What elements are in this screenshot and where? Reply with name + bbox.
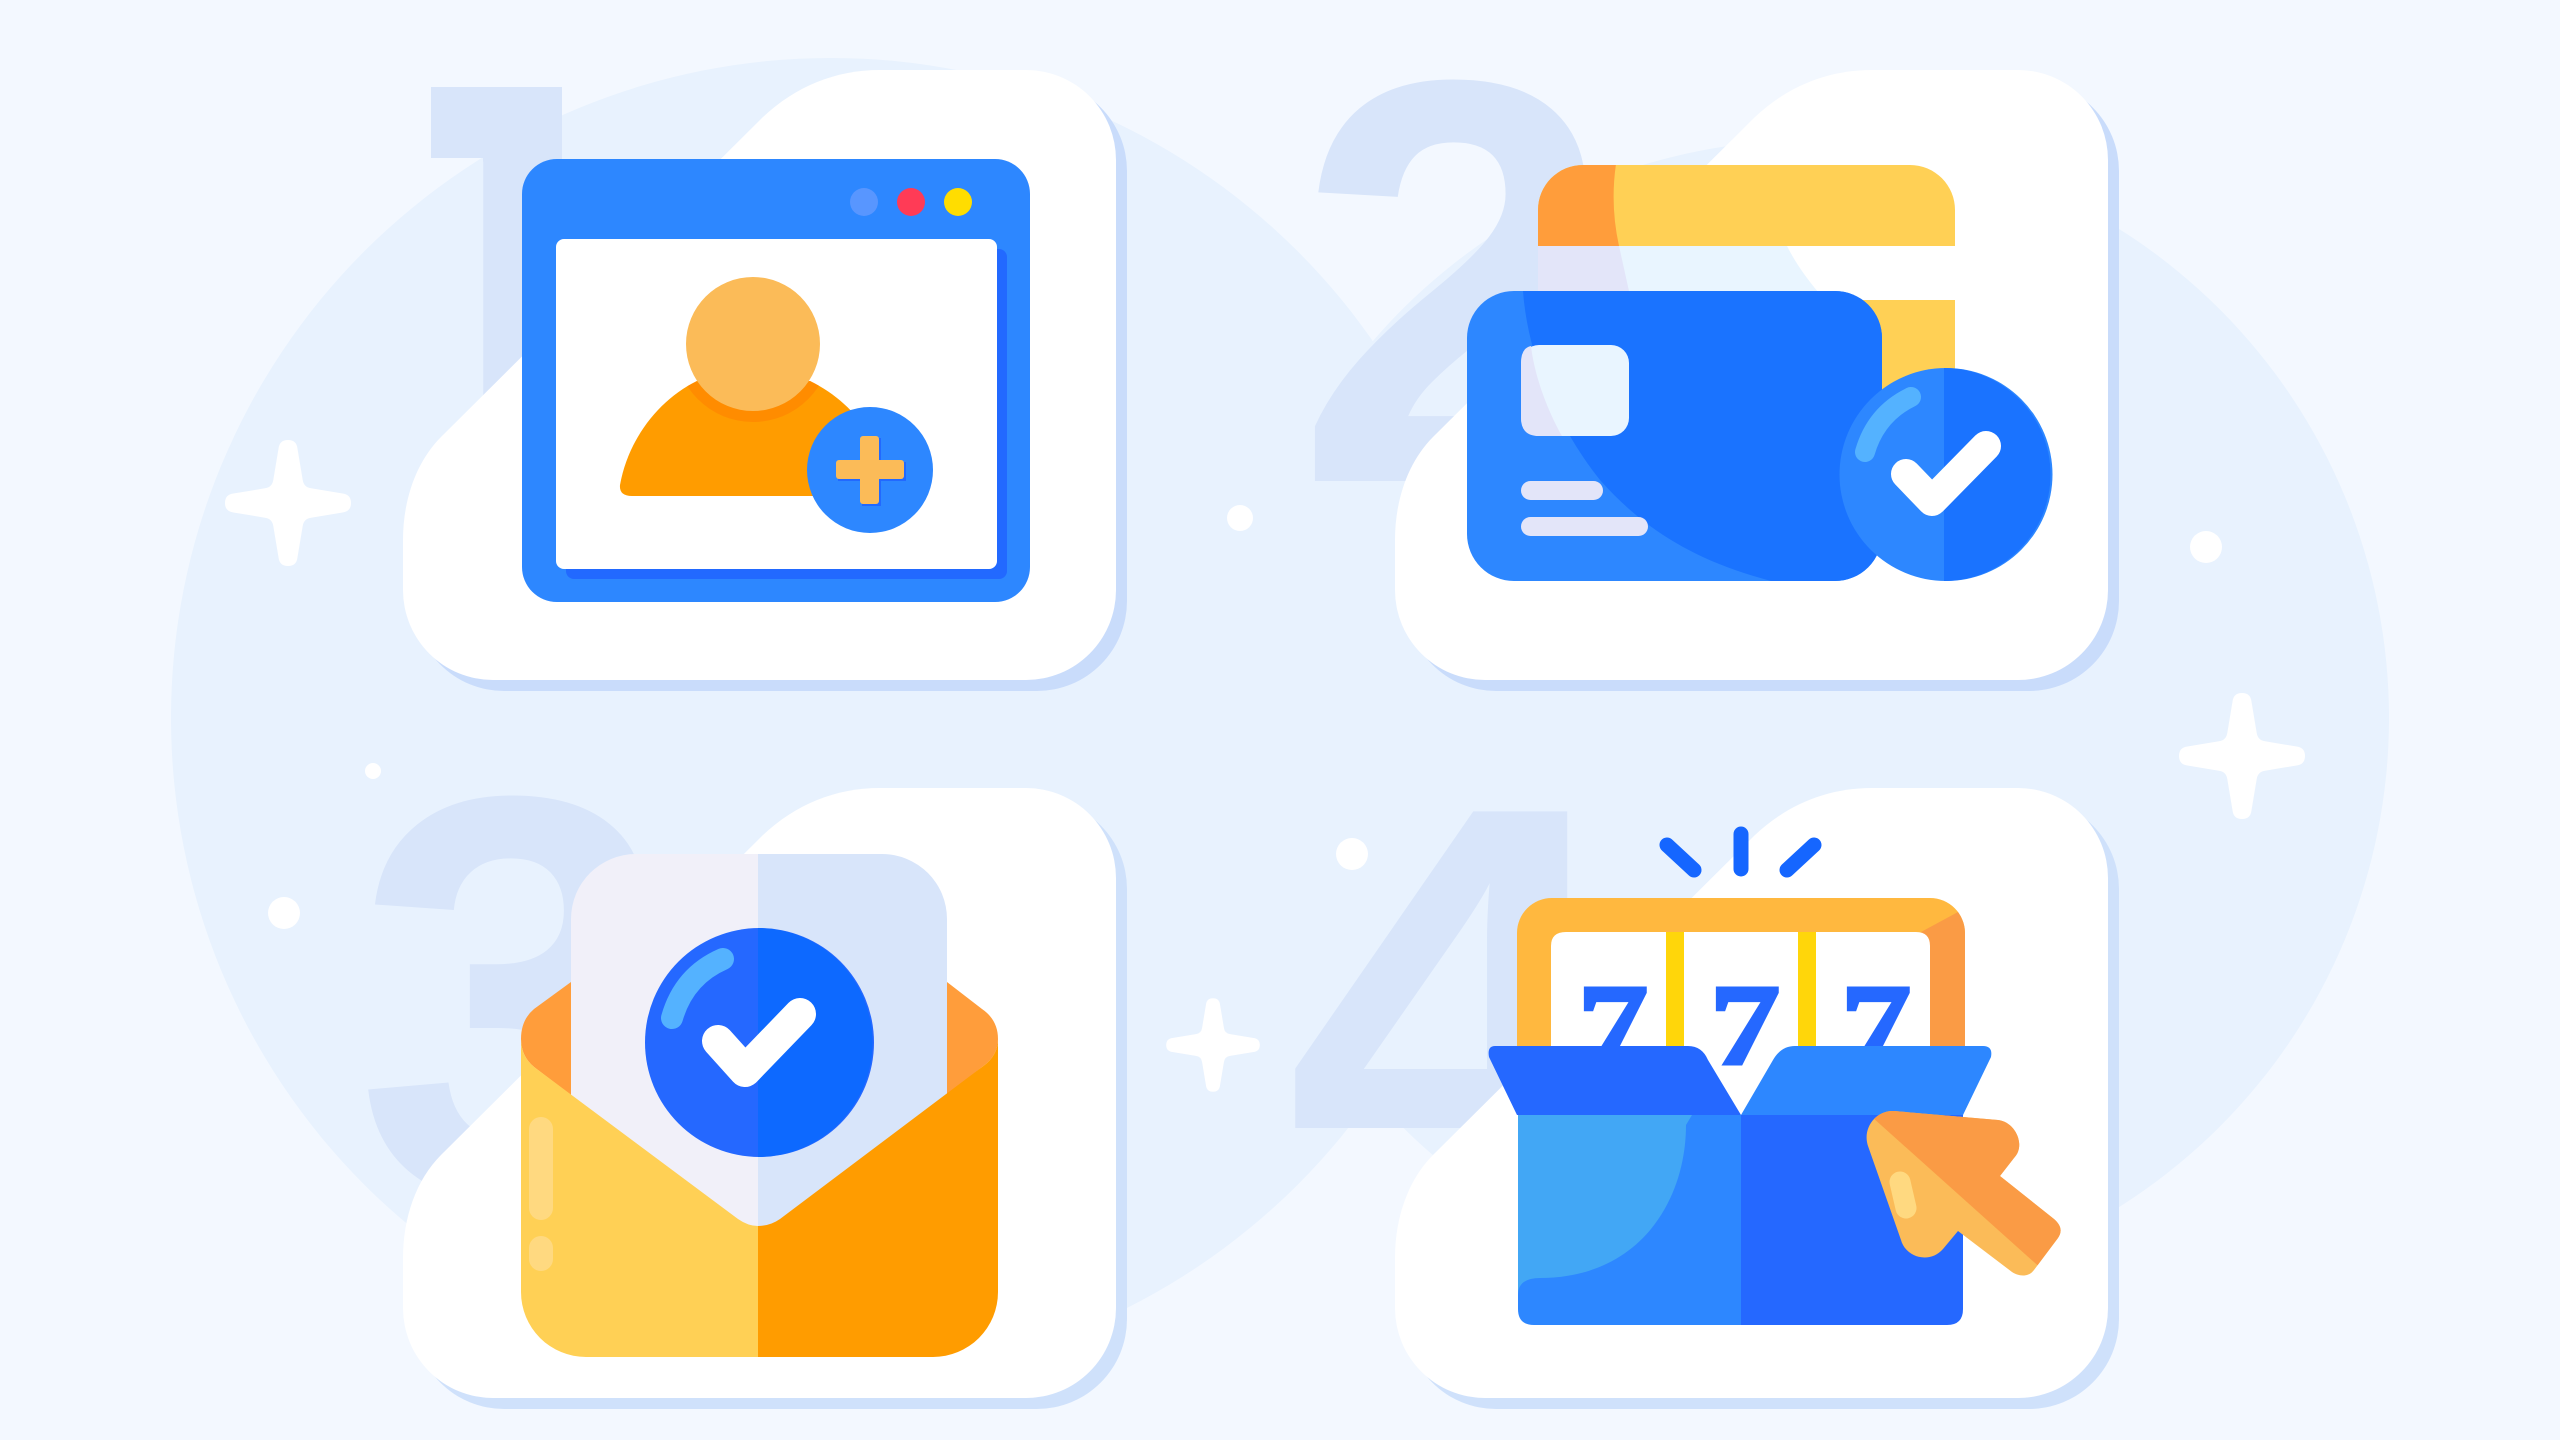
- icon: check badge: [1840, 368, 2052, 581]
- icon: sparkle rays: [1667, 834, 1814, 870]
- icon: open box: [1489, 1046, 1991, 1325]
- card 2 shadow and white card: [1395, 70, 2119, 691]
- reel numbers: 7: [1578, 961, 1648, 1089]
- icon: browser window: [522, 159, 1030, 602]
- panel 4: prize box: [1395, 788, 2119, 1409]
- icon: check badge: [645, 928, 874, 1157]
- number 1: [431, 87, 562, 394]
- sparkle centre: [1166, 998, 1260, 1092]
- number 4: 4: [1286, 687, 1631, 1332]
- background circle left: [171, 58, 1491, 1378]
- reel numbers: 7: [1710, 961, 1780, 1089]
- icon: slot machine: [1517, 898, 1965, 1089]
- panel 2: payment card: [1395, 70, 2119, 691]
- icon: back yellow card: [1538, 165, 1955, 390]
- icon: cursor: [1866, 1111, 2061, 1276]
- panel 3: email: [403, 788, 1127, 1409]
- icon: user: [620, 277, 850, 496]
- card 1 shadow and white card: [403, 70, 1127, 691]
- card 3 shadow and white card: [403, 788, 1127, 1409]
- card 4 shadow and white card: [1395, 788, 2119, 1409]
- sparkle right: [2179, 693, 2305, 819]
- number 3: 3: [355, 676, 675, 1319]
- icon: envelope front: [521, 1039, 998, 1357]
- icon: letter: [571, 854, 947, 1235]
- icon: front blue card: [1467, 291, 1882, 581]
- reel numbers: [1578, 961, 1911, 1089]
- reel numbers: 7: [1841, 961, 1911, 1089]
- icon: envelope back: [521, 982, 998, 1095]
- panel 1: new account: [403, 70, 1127, 691]
- sparkle left: [225, 440, 351, 566]
- decorative dots: [268, 505, 2222, 929]
- background circle right: [1233, 140, 2389, 1296]
- icon: plus badge: [807, 407, 933, 533]
